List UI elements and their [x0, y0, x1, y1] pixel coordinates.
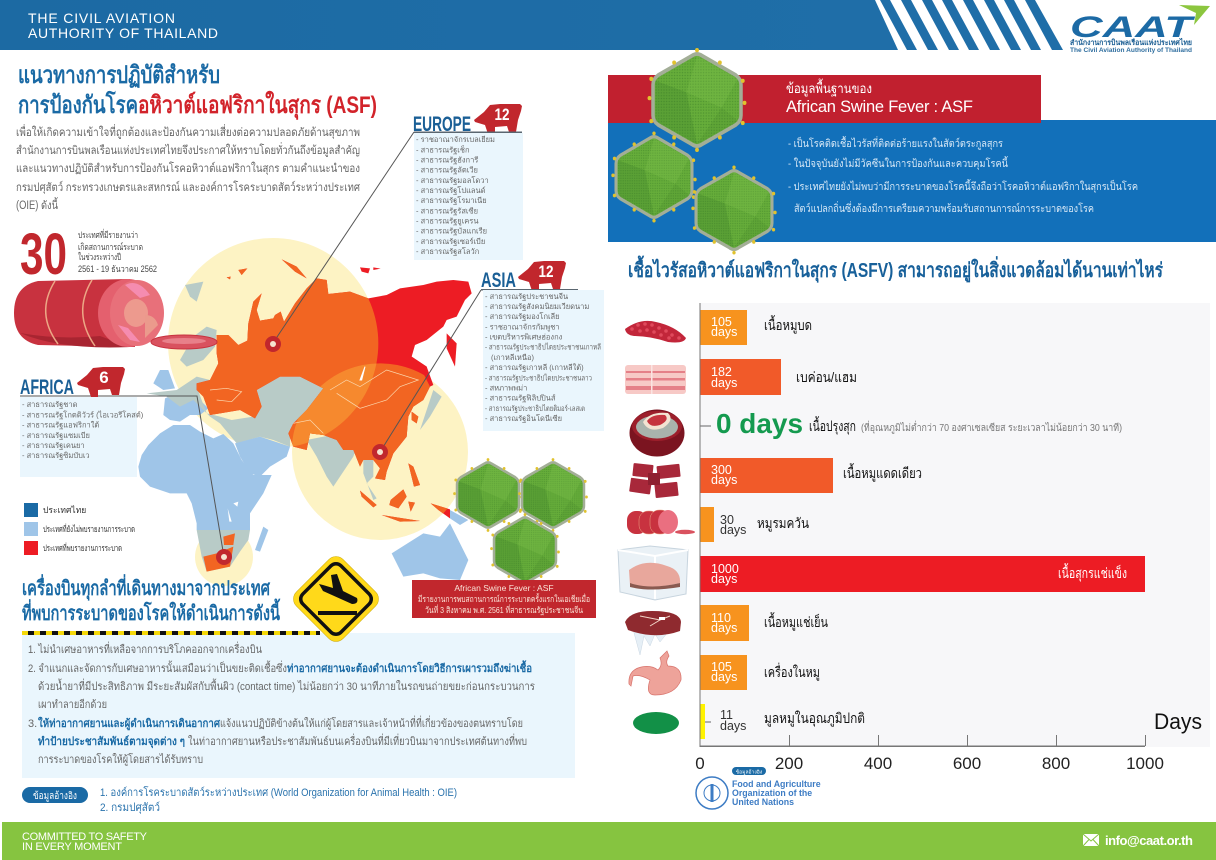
- panel: aircraft instructions: 1. ไม่นำเศษอาหารที่เหลือจากการบริโภคออกจากเครื่องบิน: [28, 641, 262, 656]
- panel: Asia countries: - สาธารณรัฐสังคมนิยมเวียดนาม: [485, 302, 589, 311]
- main title: อหิวาต์แอฟริกาในสุกร (ASF): [138, 90, 377, 121]
- chart axes: 800: [1042, 754, 1070, 773]
- Africa label: [20, 367, 144, 477]
- footer: info@caat.or.th: [1105, 833, 1193, 848]
- panel: aircraft instructions: แจ้งแนวปฏิบัติข้างต้นให้แก่ผู้โดยสารและเจ้าหน้าที่ที่เกี่ยวข้องของตนทราบโดย: [220, 715, 523, 730]
- main title: แนวทางการปฏิบัติสำหรับ: [18, 62, 220, 89]
- CAAT logo: สำนักงานการบินพลเรือนแห่งประเทศไทย: [1070, 37, 1192, 47]
- panel: Asia countries: - สาธารณรัฐประชาธิปไตยประชาชนลาว: [485, 374, 592, 382]
- Europe label: [413, 104, 523, 260]
- icon: pig Europe: [474, 104, 522, 134]
- pins: [216, 336, 388, 565]
- footer: COMMITTED TO SAFETY: [22, 831, 148, 843]
- FAO source: United Nations: [732, 797, 794, 807]
- Asia label: ASIA: [481, 269, 516, 292]
- bar: smoked pork: [700, 507, 809, 542]
- red band heading: African Swine Fever : ASF: [786, 98, 973, 116]
- footer: [2, 822, 1216, 860]
- references: [22, 785, 457, 814]
- panel: ASF basic info: [608, 48, 1216, 254]
- panel: Africa countries: - สาธารณรัฐชาด: [22, 400, 78, 409]
- chart axes: 1000: [1126, 754, 1164, 773]
- panel: Africa countries: - สาธารณรัฐแอฟริกาใต้: [22, 420, 99, 430]
- red band heading: [786, 78, 973, 116]
- hazard stripe: [22, 631, 320, 635]
- stat: 30 countries: 2561 - 19 ธันวาคม 2562: [78, 264, 157, 274]
- bar: dried pork: 300: [711, 463, 732, 477]
- bar: cooked meat: เนื้อปรุงสุก: [809, 416, 856, 435]
- bar: chilled pork: [700, 605, 828, 641]
- bar: offal: เครื่องในหมู: [764, 663, 820, 681]
- chart axes: [695, 303, 1202, 773]
- bar: bacon ham: [700, 359, 857, 395]
- panel: Asia countries: - สาธารณรัฐประชาธิปไตยติมอร์-เลสเต: [485, 404, 585, 413]
- references: ข้อมูลอ้างอิง: [33, 790, 77, 802]
- icon: grilled meat bowl: [630, 410, 684, 456]
- bar: offal: [700, 655, 820, 690]
- intro paragraph: [16, 124, 361, 212]
- panel: Europe countries: - สาธารณรัฐมอลโดวา: [416, 176, 489, 185]
- references: 1. องค์การโรคระบาดสัตว์ระหว่างประเทศ (World Organization for Animal Health : OIE): [100, 785, 457, 799]
- header title: AUTHORITY OF THAILAND: [28, 25, 218, 41]
- panel: Europe countries: - สาธารณรัฐยูเครน: [416, 216, 478, 226]
- bullet list: - ในปัจจุบันยังไม่มีวัคซีนในการป้องกันและควบคุมโรคนี้: [788, 156, 1009, 170]
- panel: aircraft instructions: การระบาดของโรคให้ผู้โดยสารได้รับทราบ: [38, 752, 203, 766]
- bar: frozen pork: days: [711, 572, 737, 586]
- bullet list: - ประเทศไทยยังไม่พบว่ามีการระบาดของโรคนี้จึงถือว่าโรคอหิวาต์แอฟริกาในสุกรเป็นโรค: [788, 179, 1138, 193]
- stat: 30 countries: 30: [20, 222, 67, 287]
- bar: feces: 11: [720, 708, 733, 722]
- world map: [20, 132, 481, 586]
- intro paragraph: กรมปศุสัตว์ กระทรวงเกษตรและสหกรณ์ และองค์การโรคระบาดสัตว์ระหว่างประเทศ: [16, 180, 361, 194]
- bar: chilled pork: days: [711, 621, 737, 635]
- bar: minced pork: เนื้อหมูบด: [764, 315, 812, 334]
- bar: dried pork: เนื้อหมูแดดเดียว: [843, 463, 922, 482]
- panel: Europe countries: - สาธารณรัฐเช็ก: [416, 144, 470, 154]
- intro paragraph: (OIE) ดังนี้: [16, 197, 58, 212]
- panel: Europe countries: [414, 133, 523, 260]
- bullet list: - เป็นโรคติดเชื้อไวรัสที่ติดต่อร้ายแรงในสัตว์ตระกูลสุกร: [788, 136, 1003, 150]
- bar: smoked pork: 30: [720, 513, 734, 527]
- chart axes: 200: [775, 754, 803, 773]
- panel: aircraft instructions: 3.: [28, 718, 37, 730]
- footer: IN EVERY MOMENT: [22, 841, 122, 853]
- map legend: [24, 503, 135, 555]
- map legend: ประเทศที่ยังไม่พบรายงานการระบาด: [43, 523, 135, 534]
- panel: Africa countries: - สาธารณรัฐเคนยา: [22, 441, 85, 450]
- panel: Asia countries: - ราชอาณาจักรกัมพูชา: [485, 322, 560, 332]
- bar: smoked pork: days: [720, 523, 746, 537]
- icon: pig Asia: [518, 261, 566, 291]
- header banner: [0, 0, 1063, 50]
- panel: aircraft instructions: ให้ท่าอากาศยานและผู้ดำเนินการเดินอากาศ: [38, 716, 221, 731]
- Europe label: EUROPE: [413, 113, 471, 136]
- bar: feces: days: [720, 719, 746, 733]
- icon: smoked pork: [627, 510, 695, 534]
- bar: frozen pork: [700, 556, 1145, 592]
- bar: frozen pork: เนื้อสุกรแช่แข็ง: [1058, 563, 1127, 582]
- aircraft heading: [22, 573, 281, 625]
- panel: Europe countries: - สาธารณรัฐโปแลนด์: [416, 186, 486, 195]
- icon: airplane landing sign: [289, 552, 383, 646]
- bar: chilled pork: 110: [711, 611, 731, 625]
- CAAT logo: The Civil Aviation Authority of Thailand: [1070, 47, 1192, 54]
- Eurasia and Oceania: [147, 259, 472, 580]
- aircraft heading: เครื่องบินทุกลำที่เดินทางมาจากประเทศ: [22, 573, 271, 601]
- icon: pig Asia: 12: [538, 262, 554, 281]
- panel: Asia countries: (เกาหลีเหนือ): [491, 353, 534, 362]
- virus illustrations: [611, 48, 777, 254]
- references: 2. กรมปศุสัตว์: [100, 801, 160, 814]
- stat: 30 countries: เกิดสถานการณ์ระบาด: [78, 241, 143, 252]
- callout: first outbreak in Asia: มีรายงานการพบสถานการณ์การระบาดครั้งแรกในเอเชียเมื่อ: [418, 593, 590, 604]
- FAO source: ข้อมูลอ้างอิง: [736, 768, 763, 776]
- chart axes: Days: [1154, 709, 1202, 734]
- panel: Europe countries: - สาธารณรัฐบัลแกเรีย: [416, 227, 487, 236]
- intro paragraph: และแนวทางปฏิบัติสำหรับการป้องกันโรคอหิวาต์แอฟริกาในสุกร ตามคำแนะนำของ: [16, 161, 360, 175]
- panel: Asia countries: - สหภาพพม่า: [485, 384, 527, 392]
- bar: minced pork: 105: [711, 315, 732, 329]
- callout: first outbreak in Asia: African Swine Fever : ASF: [454, 583, 554, 593]
- bullet list: [788, 136, 1138, 215]
- panel: Europe countries: - สาธารณรัฐลัตเวีย: [416, 166, 478, 175]
- icon: mail: [1083, 834, 1099, 846]
- icon: bacon: [625, 365, 686, 394]
- Africa label: AFRICA: [20, 376, 74, 399]
- callout: first outbreak in Asia: [412, 580, 596, 618]
- panel: aircraft instructions: ท่าอากาศยานจะต้องดำเนินการโดยวิธีการเผารวมถึงฆ่าเชื้อ: [287, 660, 532, 675]
- panel: Africa countries: - สาธารณรัฐแซมเบีย: [22, 431, 90, 440]
- panel: Europe countries: - สาธารณรัฐฮังการี: [416, 156, 478, 164]
- panel: Europe countries: - ราชอาณาจักรเบลเยียม: [416, 135, 495, 144]
- bar: feces: มูลหมูในอุณภูมิปกติ: [764, 710, 865, 727]
- panel: Asia countries: - สาธารณรัฐมองโกเลีย: [485, 312, 560, 321]
- panel: aircraft instructions: 2. จำแนกและจัดการกับเศษอาหารนั้นเสมือนว่าเป็นขยะติดเชื้อซึ่ง: [28, 660, 287, 675]
- bar: offal: 105: [711, 660, 732, 674]
- sausage illustration: [14, 279, 217, 349]
- main title: [18, 62, 377, 121]
- panel: Europe countries: - สาธารณรัฐโรมาเนีย: [416, 196, 487, 205]
- panel: Asia countries: - สาธารณรัฐประชาชนจีน: [485, 292, 568, 301]
- header title: [28, 10, 218, 41]
- FAO source: Food and Agriculture: [732, 779, 821, 789]
- icon: pig Europe: 12: [494, 105, 510, 124]
- panel: Africa countries: - สาธารณรัฐซิมบับเว: [22, 451, 90, 460]
- panel: aircraft instructions: เผาทำลายอีกด้วย: [38, 698, 107, 711]
- icon: frozen pork: [618, 546, 688, 600]
- bar: frozen pork: 1000: [711, 562, 739, 576]
- map legend: ประเทศที่พบรายงานการระบาด: [43, 542, 122, 553]
- panel: aircraft instructions: ด้วยน้ำยาที่มีประสิทธิภาพ มีระยะสัมผัสกับพื้นผิว (contact time) ไม่น้อยกว่า 30 นาทีภายในรถขนถ่ายขยะก่อนกระบวนการ: [38, 678, 535, 693]
- stat: 30 countries: ประเทศที่มีรายงานว่า: [78, 228, 138, 240]
- panel: Europe countries: - สาธารณรัฐเซอร์เบีย: [416, 237, 485, 246]
- panel: aircraft instructions: ทำป้ายประชาสัมพันธ์ตามจุดต่าง ๆ: [38, 735, 185, 749]
- panel: Asia countries: - เขตบริหารพิเศษฮ่องกง: [485, 332, 563, 342]
- aircraft heading: ที่พบการระบาดของโรคให้ดำเนินการดังนี้: [22, 598, 281, 625]
- header title: THE CIVIL AVIATION: [28, 10, 175, 26]
- CAAT logo: [1070, 5, 1210, 54]
- icon: dried pork cubes: [629, 463, 681, 498]
- affected zone circles: [168, 238, 468, 586]
- bar: cooked meat: [700, 408, 1122, 439]
- bullet list: สัตว์แปลกถิ่นซึ่งต้องมีการเตรียมความพร้อมรับสถานการณ์การระบาดของโรค: [794, 201, 1094, 215]
- panel: Asia countries: - สาธารณรัฐฟิลิปปินส์: [485, 394, 556, 402]
- bar: dried pork: [700, 458, 922, 493]
- panel: Africa countries: [20, 397, 144, 477]
- icon: green feces: [633, 712, 679, 734]
- panel: Europe countries: - สาธารณรัฐรัสเซีย: [416, 206, 478, 215]
- panel: Asia countries: - สาธารณรัฐเกาหลี (เกาหลีใต้): [485, 363, 584, 372]
- icon: stomach: [629, 651, 681, 695]
- bar: dried pork: days: [711, 473, 737, 487]
- stat: 30 countries: [20, 222, 157, 287]
- main title: การป้องกันโรค: [18, 90, 138, 119]
- bar: bacon ham: 182: [711, 365, 732, 379]
- callout: first outbreak in Asia: วันที่ 3 สิงหาคม พ.ศ. 2561 ที่สาธารณรัฐประชาชนจีน: [425, 604, 583, 616]
- red band heading: ข้อมูลพื้นฐานของ: [786, 78, 872, 97]
- bar: smoked pork: หมูรมควัน: [757, 515, 809, 532]
- bar: cooked meat: (ที่อุณหภูมิไม่ต่ำกว่า 70 องศาเซลเซียส ระยะเวลาไม่น้อยกว่า 30 นาที): [861, 420, 1122, 434]
- FAO source: Organization of the: [732, 788, 812, 798]
- chart axes: 0: [695, 754, 705, 773]
- bar: chilled pork: เนื้อหมูแช่เย็น: [764, 612, 828, 631]
- Africa and Western Europe: [138, 370, 272, 572]
- panel: Asia countries: - สาธารณรัฐอินโดนีเซีย: [485, 414, 562, 423]
- panel: aircraft instructions: ในท่าอากาศยานหรือประชาสัมพันธ์บนเครื่องบินที่มีเที่ยวบินมาจากประเทศต้นทางที่พบ: [188, 733, 527, 748]
- panel: Asia countries: - สาธารณรัฐประชาธิปไตยประชาชนเกาหลี: [485, 342, 601, 352]
- chart axes: 400: [864, 754, 892, 773]
- bar: feces: [700, 704, 865, 739]
- bar: minced pork: days: [711, 325, 737, 339]
- icon: pig Africa: 6: [99, 368, 109, 387]
- panel: aircraft instructions: [22, 633, 575, 778]
- chart axes: 600: [953, 754, 981, 773]
- intro paragraph: สำนักงานการบินพลเรือนแห่งประเทศไทยจึงประกาศให้ทราบโดยทั่วกันถึงข้อมูลสำคัญ: [16, 142, 360, 157]
- intro paragraph: เพื่อให้เกิดความเข้าใจที่ถูกต้องและป้องกันความเสี่ยงต่อความปลอดภัยด้านสุขภาพ: [16, 124, 360, 139]
- Asia label: [481, 261, 604, 431]
- bar: minced pork: [700, 310, 812, 345]
- bar: bacon ham: days: [711, 376, 737, 390]
- bar: cooked meat: 0 days: [716, 408, 803, 439]
- map virus cluster: [453, 458, 588, 587]
- map legend: ประเทศไทย: [43, 505, 86, 515]
- panel: Africa countries: - สาธารณรัฐโกตดิวัวร์ (ไอเวอรีโคสต์): [22, 410, 144, 420]
- panel: Europe countries: - สาธารณรัฐสโลวัก: [416, 247, 479, 256]
- bar: bacon ham: เบค่อน/แฮม: [796, 369, 857, 385]
- bar chart: virus survival days: [695, 303, 1210, 773]
- icon: chilled pork: [625, 611, 681, 655]
- CAAT logo: CAAT: [1070, 11, 1196, 44]
- panel: Asia countries: [483, 290, 604, 431]
- stat: 30 countries: ในช่วงระหว่างปี: [78, 252, 121, 262]
- icon: minced pork: [625, 321, 686, 342]
- FAO source: [696, 767, 821, 809]
- bar: offal: days: [711, 670, 737, 684]
- leader lines: [20, 132, 481, 557]
